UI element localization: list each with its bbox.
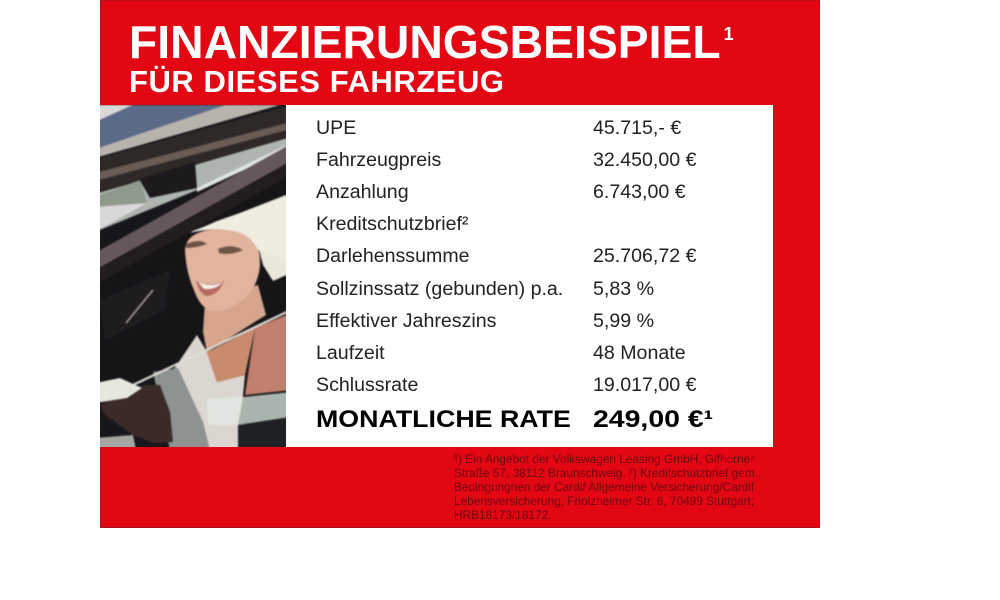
row: Anzahlung: [316, 181, 686, 203]
row: Schlussrate: 19.017,00 €: [593, 374, 697, 396]
footnote: Bedingungnen der Cardif Allgemeine Versicherung/Cardif: [454, 480, 754, 494]
row: Effektiver Jahreszins: 5,99 %: [593, 310, 654, 332]
row: Fahrzeugpreis: Fahrzeugpreis: [316, 149, 441, 171]
neck: [203, 285, 266, 352]
hair fringe: [190, 195, 291, 260]
row: Sollzinssatz: 5,83 %: [593, 278, 654, 300]
panel: red background: [100, 0, 820, 528]
row: Laufzeit: 48 Monate: [593, 342, 686, 364]
footnote: Straße 57, 38112 Braunschweig. ²) Kreditschutzbrief gem.: [454, 466, 758, 480]
row: Kreditschutzbrief: Kreditschutzbrief²: [316, 213, 468, 235]
row: Schlussrate: [316, 374, 697, 396]
jacket and seat: [95, 175, 291, 410]
footnote: [454, 452, 758, 522]
row: Fahrzeugpreis: 32.450,00 €: [593, 149, 697, 171]
row: Darlehenssumme: [316, 245, 697, 267]
row: Monatliche Rate: [316, 406, 713, 433]
footnote: ¹) Ein Angebot der Volkswagen Leasing GmbH, Gifhorner: [454, 452, 754, 466]
row: Monatliche Rate: 249,00 €¹: [593, 406, 713, 433]
row: Monatliche Rate: MONATLICHE RATE: [316, 406, 571, 433]
row: Anzahlung: Anzahlung: [316, 181, 409, 203]
row: Darlehenssumme: 25.706,72 €: [593, 245, 697, 267]
row: Fahrzeugpreis: [316, 149, 697, 171]
row: Effektiver Jahreszins: Effektiver Jahreszins: [316, 310, 496, 332]
row: Laufzeit: Laufzeit: [316, 342, 385, 364]
footnote: Lebensversicherung, Friolzheimer Str. 6, 70499 Stuttgart;: [454, 494, 754, 508]
footnote: HRB18173/18172.: [454, 508, 551, 522]
row: Darlehenssumme: Darlehenssumme: [316, 245, 470, 267]
row: Effektiver Jahreszins: [316, 310, 654, 332]
title: FINANZIERUNGSBEISPIEL1: [129, 16, 734, 68]
glass reflection: [170, 335, 245, 450]
panel: data table: [286, 105, 773, 447]
hand: [100, 385, 173, 443]
face: [185, 229, 260, 311]
subtitle: FÜR DIESES FAHRZEUG: [129, 64, 505, 99]
row: UPE: [316, 117, 681, 139]
row: UPE: UPE: [316, 117, 356, 139]
phone: [95, 378, 142, 403]
row: Sollzinssatz: Sollzinssatz (gebunden) p.a.: [316, 278, 563, 300]
row: Laufzeit: [316, 342, 686, 364]
photo: woman smiling in car: [100, 105, 286, 447]
row: Anzahlung: 6.743,00 €: [593, 181, 686, 203]
row: UPE: 45.715,- €: [593, 117, 681, 139]
hair back: [190, 193, 291, 281]
row: Schlussrate: Schlussrate: [316, 374, 418, 396]
